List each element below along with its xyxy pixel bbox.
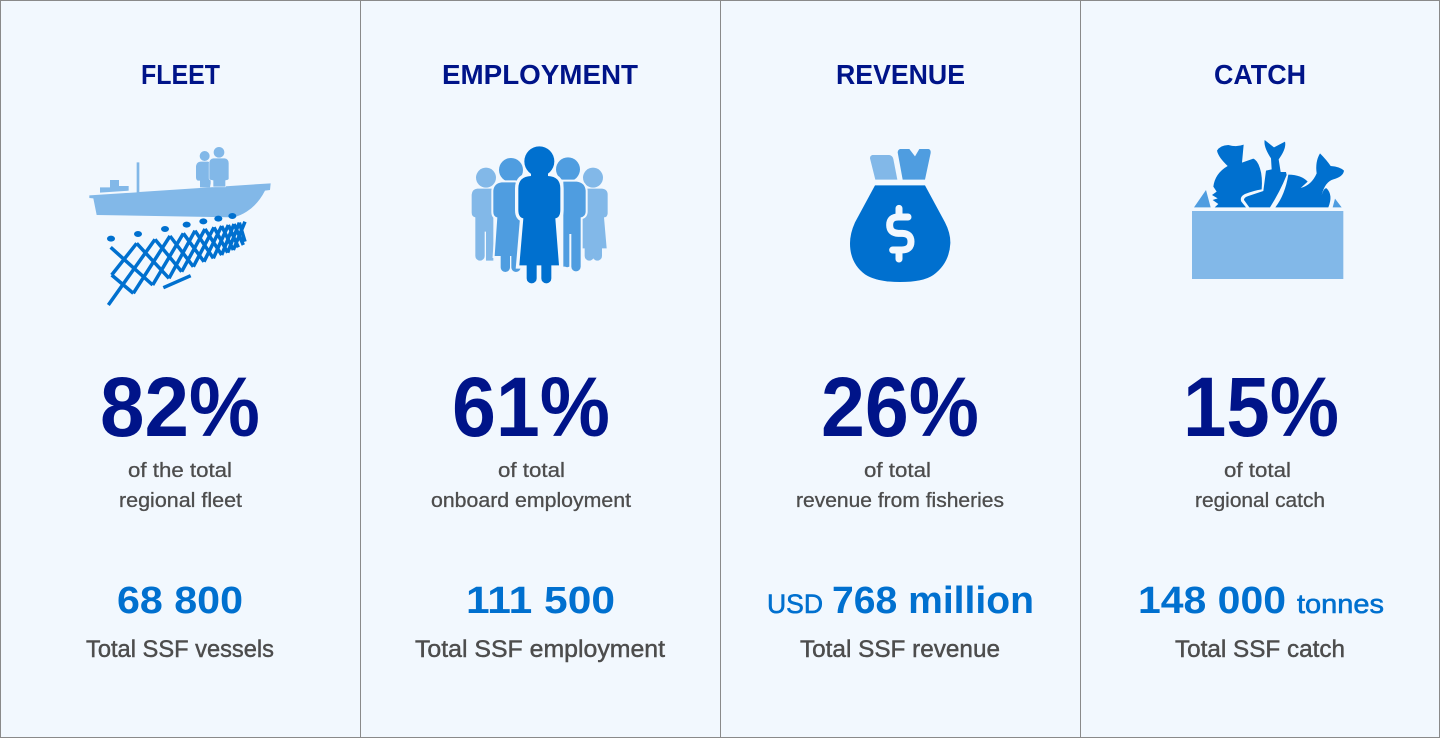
description: fleet: of the total	[128, 460, 232, 482]
percentage: catch: 15%	[1183, 360, 1339, 454]
description: employment: of total	[498, 460, 565, 482]
description: fleet	[119, 460, 242, 512]
description: employment	[431, 460, 631, 512]
panel: fleet	[86, 59, 274, 663]
description: employment: onboard employment	[431, 490, 631, 512]
panel: revenue	[767, 59, 1034, 663]
description: catch: regional catch	[1195, 490, 1325, 512]
total: catch: tonnes	[1297, 589, 1384, 619]
label: employment: Total SSF employment	[415, 636, 665, 663]
label: fleet: Total SSF vessels	[86, 636, 274, 663]
panel: catch	[1138, 59, 1384, 663]
panel: employment	[415, 59, 665, 663]
label: revenue: Total SSF revenue	[800, 636, 1000, 663]
icon: fishing boat with net	[89, 147, 271, 305]
description: catch: of total	[1224, 460, 1291, 482]
icon: crate of fish	[1192, 140, 1344, 279]
icon: group of people	[472, 146, 608, 283]
percentage: fleet: 82%	[100, 360, 260, 454]
description: revenue: of total	[864, 460, 931, 482]
percentage: revenue: 26%	[821, 360, 979, 454]
icon: money bag	[850, 149, 950, 282]
heading: fleet: FLEET	[141, 59, 220, 90]
heading: employment: EMPLOYMENT	[442, 59, 638, 90]
total: employment: 111 500	[466, 580, 615, 622]
description: revenue: revenue from fisheries	[796, 490, 1004, 512]
description: catch	[1195, 460, 1325, 512]
description: revenue	[796, 460, 1004, 512]
percentage: employment: 61%	[452, 360, 610, 454]
total: fleet: 68 800	[117, 580, 243, 622]
total: revenue: USD	[767, 589, 823, 619]
heading: catch: CATCH	[1214, 59, 1306, 90]
total: revenue: 768 million	[832, 580, 1034, 622]
description: fleet: regional fleet	[119, 490, 242, 512]
total: catch	[1138, 580, 1384, 622]
total: catch: 148 000	[1138, 580, 1286, 622]
label: catch: Total SSF catch	[1175, 636, 1345, 663]
heading: revenue: REVENUE	[836, 59, 965, 90]
